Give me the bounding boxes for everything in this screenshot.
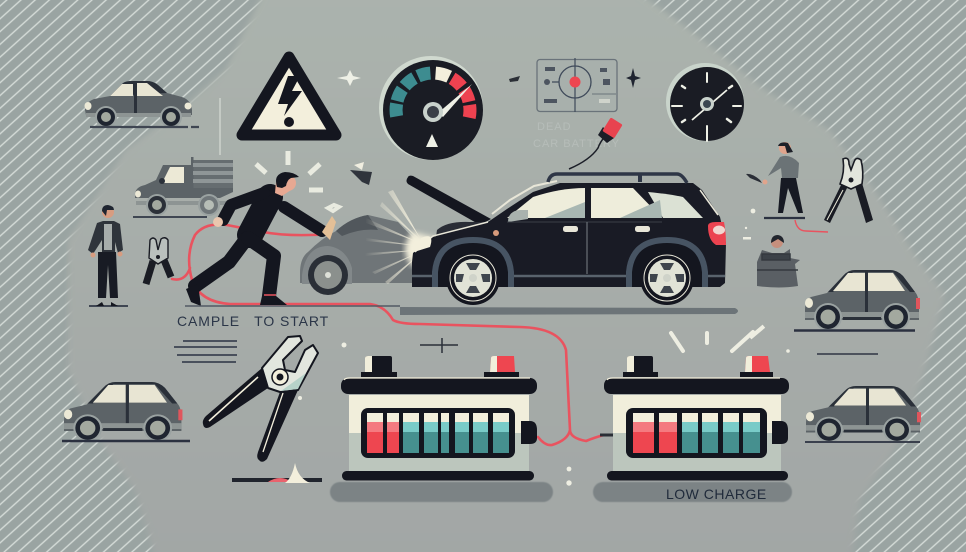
car: left lower hatchback bbox=[64, 382, 182, 442]
cable: red jumper lead bbox=[172, 224, 604, 445]
car: main black car bbox=[406, 174, 726, 305]
icon: big jumper clamp bbox=[203, 336, 318, 462]
car ground line bbox=[62, 440, 190, 442]
battery: left bbox=[330, 356, 553, 502]
text: cample to start: CAMPLE TO START bbox=[177, 313, 329, 329]
text: dead car battery: CAR BATTERY bbox=[533, 138, 620, 150]
thin pole bbox=[219, 98, 221, 155]
person: right figure with clamp bbox=[746, 142, 805, 218]
car: right lower hatchback bbox=[806, 386, 921, 443]
marks right of car bbox=[817, 353, 878, 355]
gauge: battery dial bbox=[379, 56, 483, 160]
car: grey car with flare bbox=[300, 215, 415, 295]
icon: star mark bbox=[626, 68, 641, 88]
icon: small clamp bbox=[146, 238, 171, 284]
car ground shadow bbox=[400, 307, 738, 315]
headlight flare bbox=[365, 190, 436, 284]
icon: warning triangle bbox=[242, 57, 336, 135]
car ground line bbox=[794, 329, 915, 332]
text: dead car battery: DEAD bbox=[537, 121, 572, 133]
car: pickup truck bbox=[133, 157, 233, 217]
text: low charge: LOW CHARGE bbox=[666, 486, 767, 502]
icon: person with bag bbox=[757, 235, 800, 288]
spark marks above right battery bbox=[671, 332, 753, 351]
small connector marks bbox=[420, 338, 458, 353]
person: standing man bbox=[88, 205, 128, 306]
small white specks bbox=[298, 209, 790, 486]
gauge: clock dial bbox=[666, 63, 744, 141]
text: dead car battery bbox=[533, 121, 620, 150]
icon: sparkle bbox=[337, 70, 361, 86]
car ground line bbox=[805, 441, 920, 443]
impact spark marks bbox=[256, 151, 364, 211]
small dark mark bbox=[509, 76, 520, 82]
car: top left sedan bbox=[84, 81, 199, 128]
cable: short red lead bbox=[795, 220, 828, 232]
person ground line bbox=[185, 305, 400, 307]
person: man running with cable bbox=[186, 172, 336, 306]
battery: right bbox=[593, 356, 792, 502]
panel: dashboard indicator bbox=[537, 58, 617, 112]
bottom spark on ground bbox=[232, 463, 322, 483]
icon: red plug with cable bbox=[569, 117, 623, 169]
car: right upper hatchback bbox=[805, 270, 920, 331]
small dark debris bbox=[350, 170, 372, 185]
text lines block bbox=[174, 341, 237, 362]
icon: right clamp bbox=[824, 158, 873, 223]
